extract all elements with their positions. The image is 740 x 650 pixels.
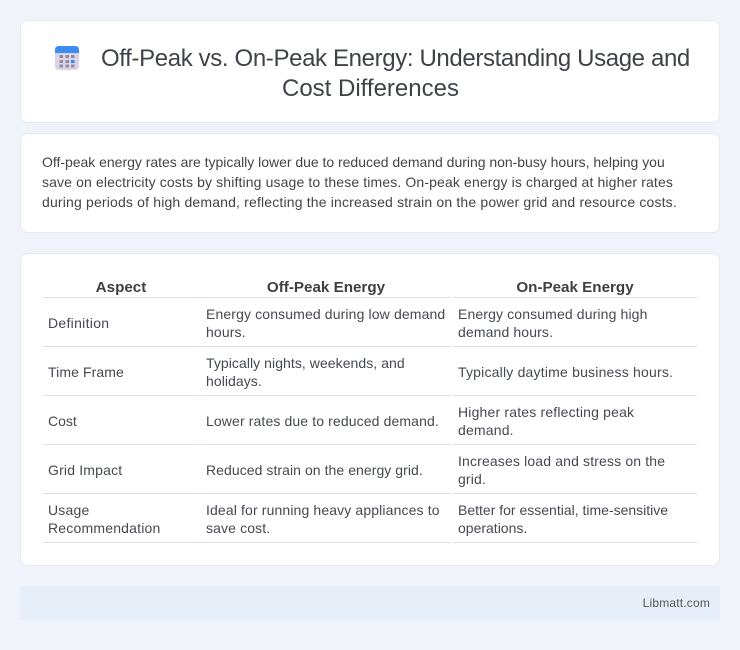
cell: on-peak definition: [458, 306, 648, 340]
text block: introduction: save on electricity costs by shifting usage to these times. On-peak energy is charged at higher rates: [42, 174, 673, 190]
footer: [20, 586, 720, 620]
row: Usage Recommendation: [48, 502, 161, 536]
row: Usage Recommendation: Recommendation: [48, 520, 161, 536]
cell: off-peak grid impact: Reduced strain on the energy grid.: [206, 462, 423, 478]
title: Cost Differences: [282, 75, 459, 102]
text block: introduction: during periods of high demand, reflecting the increased strain on the power grid and resource costs.: [42, 194, 677, 210]
cell: off-peak time frame: holidays.: [206, 373, 262, 389]
row: Definition: Definition: [48, 315, 109, 331]
text block: introduction: Off-peak energy rates are typically lower due to reduced demand during non-busy hours, helping you: [42, 154, 665, 170]
heading: Off-Peak Energy: Off-Peak Energy: [267, 279, 385, 296]
cell: on-peak usage: Better for essential, time-sensitive: [458, 502, 668, 518]
title: [101, 45, 690, 102]
cell: on-peak grid impact: [458, 453, 665, 487]
cell: off-peak time frame: Typically nights, weekends, and: [206, 355, 405, 371]
cell: on-peak grid impact: Increases load and stress on the: [458, 453, 665, 469]
text block: introduction: [42, 154, 677, 210]
cell: on-peak grid impact: grid.: [458, 471, 486, 487]
panel: header: [20, 20, 720, 123]
cell: on-peak definition: demand hours.: [458, 324, 553, 340]
panel: introduction: [20, 133, 720, 233]
row: Time Frame: Time Frame: [48, 364, 124, 380]
cell: off-peak definition: Energy consumed during low demand: [206, 306, 445, 322]
panel: comparison table: [20, 253, 720, 566]
row: Usage Recommendation: Usage: [48, 502, 89, 518]
cell: on-peak cost: demand.: [458, 422, 514, 438]
heading: Aspect: Aspect: [96, 279, 146, 296]
cell: off-peak time frame: [206, 355, 405, 389]
cell: on-peak cost: Higher rates reflecting peak: [458, 404, 634, 420]
cell: on-peak usage: operations.: [458, 520, 527, 536]
cell: on-peak time frame: Typically daytime business hours.: [458, 364, 673, 380]
cell: off-peak cost: Lower rates due to reduced demand.: [206, 413, 439, 429]
row: Grid Impact: Grid Impact: [48, 462, 122, 478]
icon: calendar: [55, 46, 79, 70]
title: Off-Peak vs. On-Peak Energy: Understanding Usage and: [101, 45, 690, 72]
cell: on-peak definition: Energy consumed during high: [458, 306, 648, 322]
cell: off-peak usage: Ideal for running heavy appliances to: [206, 502, 440, 518]
cell: off-peak usage: [206, 502, 440, 536]
cell: on-peak cost: [458, 404, 634, 438]
heading: On-Peak Energy: On-Peak Energy: [516, 279, 634, 296]
row: Cost: Cost: [48, 413, 77, 429]
cell: off-peak definition: [206, 306, 445, 340]
cell: on-peak usage: [458, 502, 668, 536]
footer credit: Libmatt.com: [643, 596, 710, 610]
cell: off-peak usage: save cost.: [206, 520, 270, 536]
cell: off-peak definition: hours.: [206, 324, 246, 340]
